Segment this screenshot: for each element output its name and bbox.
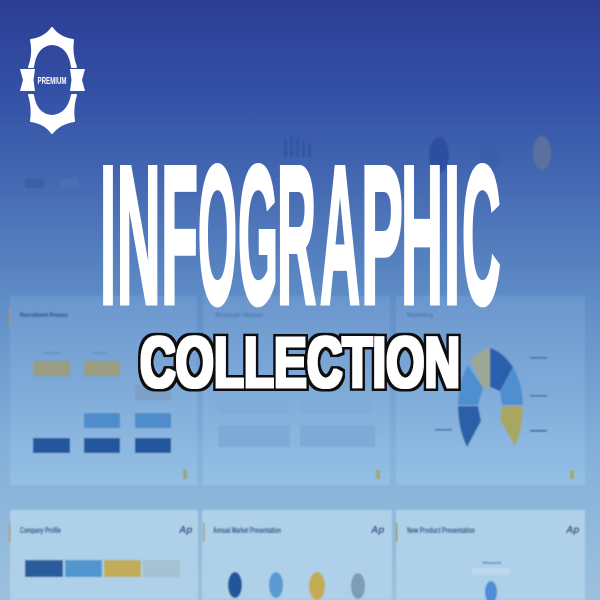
title: INFOGRAPHIC: F xyxy=(161,125,198,345)
top slide faint elements xyxy=(25,136,551,188)
title: INFOGRAPHIC: R xyxy=(277,125,316,345)
panel: process slide xyxy=(9,296,197,485)
panel: product presentation slide: Research xyxy=(483,560,502,565)
panel: product presentation slide xyxy=(396,510,585,600)
panel: donut chart slide xyxy=(396,296,585,485)
title: INFOGRAPHIC: N xyxy=(117,125,161,345)
panel: company profile slide xyxy=(9,510,198,600)
panel: donut chart slide: Marketing xyxy=(407,313,433,319)
title: INFOGRAPHIC: I xyxy=(444,125,460,345)
donut chart xyxy=(458,348,523,447)
title: INFOGRAPHIC: G xyxy=(238,125,278,345)
icon: premium badge xyxy=(20,28,85,133)
panel: process slide: Recruitment Process xyxy=(20,313,69,319)
title: INFOGRAPHIC xyxy=(100,125,501,345)
panel: company profile slide: Company Profile xyxy=(20,526,61,535)
title: INFOGRAPHIC: H xyxy=(401,125,443,345)
panel: company profile slide: Ap xyxy=(178,525,192,536)
title: INFOGRAPHIC: A xyxy=(320,125,360,345)
title: INFOGRAPHIC: P xyxy=(361,125,403,345)
panel: process slide: Director xyxy=(93,350,108,355)
panel: market presentation slide: Annual Market Presentation xyxy=(213,526,281,535)
panel: product presentation slide: Ap xyxy=(565,525,579,536)
subtitle: COLLECTION: COLLECTION xyxy=(140,324,460,403)
panel: market presentation slide: Ap xyxy=(370,525,384,536)
badge ring xyxy=(29,28,76,67)
title: INFOGRAPHIC: O xyxy=(198,125,237,345)
panel: market presentation slide xyxy=(202,510,392,600)
blurred slide collage xyxy=(9,136,585,600)
panel: process slide: Manager xyxy=(44,350,60,355)
title: INFOGRAPHIC: I xyxy=(100,125,116,345)
badge label: PREMIUM xyxy=(38,76,66,87)
panel: text slide: Strategic Market xyxy=(215,313,263,319)
panel: product presentation slide: New Product Presentation xyxy=(407,526,475,535)
badge ribbon xyxy=(20,69,35,91)
panel: text slide xyxy=(203,296,390,485)
